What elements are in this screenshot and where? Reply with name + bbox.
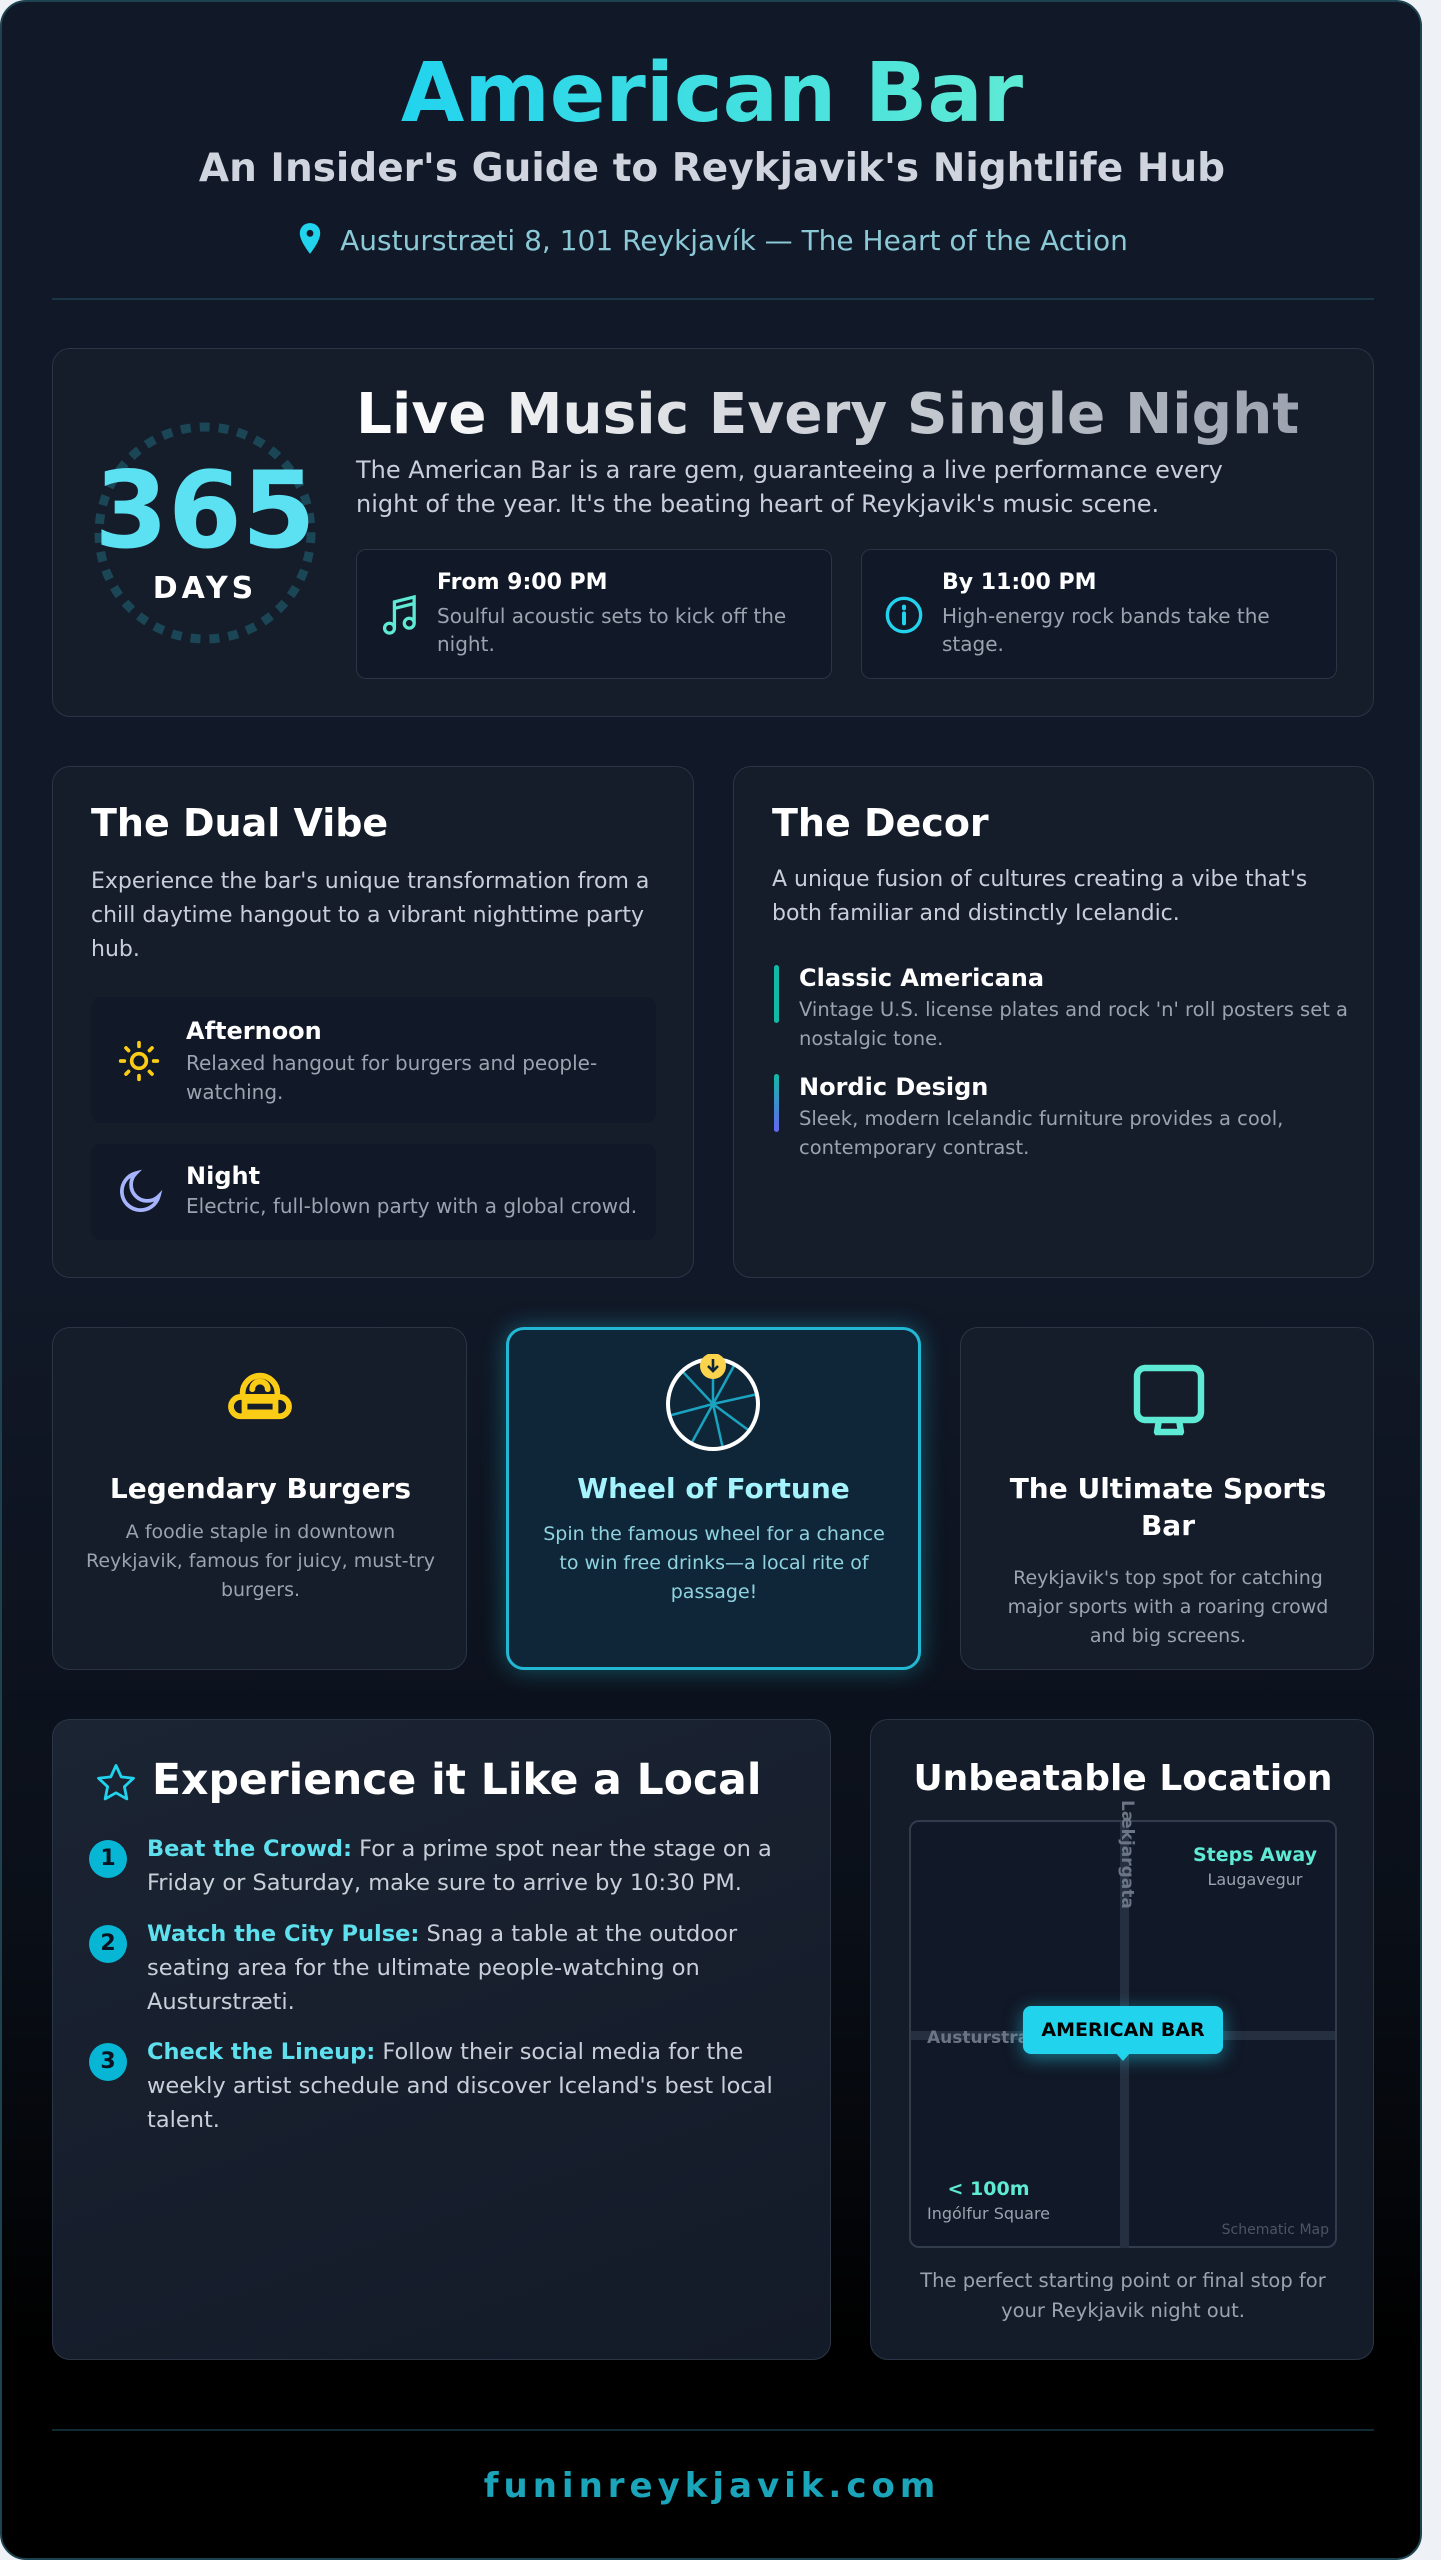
panel: live music: [52, 348, 1374, 717]
item: classic americana: Vintage U.S. license plates and rock 'n' roll posters set a nostalgic tone.: [799, 998, 1348, 1050]
icon: sun: [118, 1040, 160, 1082]
box: from 9: From 9:00 PM: [437, 570, 608, 595]
365 days badge: [94, 422, 316, 644]
item: nordic design: Nordic Design: [799, 1073, 988, 1101]
item: nordic design: [774, 1073, 1283, 1159]
afternoon: Afternoon: [186, 1017, 322, 1045]
tip 3: Check the Lineup: Follow their social media for the weekly artist schedule and discover Iceland's best local talent.: [147, 2039, 773, 2133]
night: Night: [186, 1162, 260, 1190]
card: sports bar: Reykjavik's top spot for catching major sports with a roaring crowd and big screens.: [1008, 1567, 1328, 1647]
panel: dual vibe: [52, 766, 694, 1278]
marker: american bar: AMERICAN BAR: [1041, 2019, 1205, 2041]
icon: info: [886, 596, 922, 634]
night: [91, 1144, 656, 1240]
address line: Austurstræti 8, 101 Reykjavík — The Heart of the Action: [340, 224, 1128, 257]
card: wheel of fortune: Spin the famous wheel for a chance to win free drinks—a local rite of passage!: [543, 1523, 885, 1603]
map: [909, 1820, 1337, 2248]
box: by 11: [861, 549, 1337, 679]
card: burgers: A foodie staple in downtown Reykjavik, famous for juicy, must-try burgers.: [86, 1521, 435, 1601]
panel: location: Unbeatable Location: [913, 1758, 1333, 1799]
panel: decor: A unique fusion of cultures creating a vibe that's both familiar and distinctly Icelandic.: [772, 867, 1307, 926]
item: nordic design: Sleek, modern Icelandic furniture provides a cool, contemporary contrast.: [799, 1107, 1283, 1159]
afternoon: Relaxed hangout for burgers and people-watching.: [186, 1051, 597, 1104]
item: classic americana: Classic Americana: [799, 964, 1044, 992]
map: Ingólfur Square: [927, 2204, 1050, 2223]
panel: location: The perfect starting point or final stop for your Reykjavik night out.: [920, 2269, 1326, 2322]
card: burgers: [52, 1327, 467, 1670]
panel: decor: [733, 766, 1374, 1278]
tip 2: 2: [100, 1931, 116, 1956]
box: from 9: Soulful acoustic sets to kick off the night.: [437, 604, 786, 656]
icon: moon: [120, 1170, 162, 1212]
card: sports bar: The Ultimate Sports Bar: [1010, 1472, 1326, 1542]
map: Austurstræti: [927, 2028, 1049, 2048]
map: Schematic Map: [1222, 2222, 1329, 2238]
panel: dual vibe: Experience the bar's unique transformation from a chill daytime hangout to a vibrant nighttime party hub.: [91, 869, 649, 962]
card: wheel of fortune: Wheel of Fortune: [577, 1472, 850, 1505]
map: Laugavegur: [1207, 1870, 1302, 1889]
marker: american bar: [1023, 2006, 1223, 2054]
subtitle: An Insider's Guide to Reykjavik's Nightlife Hub: [199, 146, 1225, 191]
afternoon: [91, 997, 656, 1123]
panel: dual vibe: The Dual Vibe: [91, 801, 388, 845]
tip 2: Watch the City Pulse: Snag a table at the outdoor seating area for the ultimate people-watching on Austurstræti.: [147, 1921, 737, 2015]
icon: burger: [228, 1372, 292, 1420]
panel: decor: The Decor: [772, 801, 989, 845]
icon: music: [382, 594, 416, 635]
map: Lækjargata: [1117, 1800, 1137, 1909]
night: Electric, full-blown party with a global crowd.: [186, 1194, 637, 1218]
icon: wheel: [666, 1354, 760, 1451]
tip 3: 3: [100, 2049, 116, 2074]
map: < 100m: [948, 2178, 1030, 2200]
panel: location: [870, 1719, 1374, 2360]
tip 1: 1: [100, 1846, 116, 1871]
item: classic americana: [774, 964, 1348, 1050]
tip 1: Beat the Crowd: For a prime spot near the stage on a Friday or Saturday, make sure to arrive by 10:30 PM.: [147, 1836, 772, 1896]
icon: tv: [1134, 1364, 1204, 1436]
365 days badge: DAYS: [153, 571, 257, 606]
card: wheel of fortune: [506, 1327, 921, 1670]
icon: star: [97, 1764, 135, 1800]
footer: funinreykjavik.com: [484, 2466, 940, 2506]
description: The American Bar is a rare gem, guaranteeing a live performance every night of the year. It's the beating heart of Reykjavik's music scene.: [356, 456, 1223, 518]
365 days badge: 365: [94, 449, 316, 572]
card: burgers: Legendary Burgers: [110, 1472, 411, 1505]
heading: Live Music Every Single Night: [356, 382, 1299, 447]
box: by 11: High-energy rock bands take the stage.: [942, 604, 1270, 656]
heading: Experience it Like a Local: [152, 1756, 761, 1805]
title: American Bar: [401, 46, 1023, 141]
panel: experience like a local: [52, 1719, 831, 2360]
map: Steps Away: [1193, 1844, 1317, 1866]
card: sports bar: [960, 1327, 1374, 1670]
box: by 11: By 11:00 PM: [942, 570, 1096, 595]
box: from 9: [356, 549, 832, 679]
